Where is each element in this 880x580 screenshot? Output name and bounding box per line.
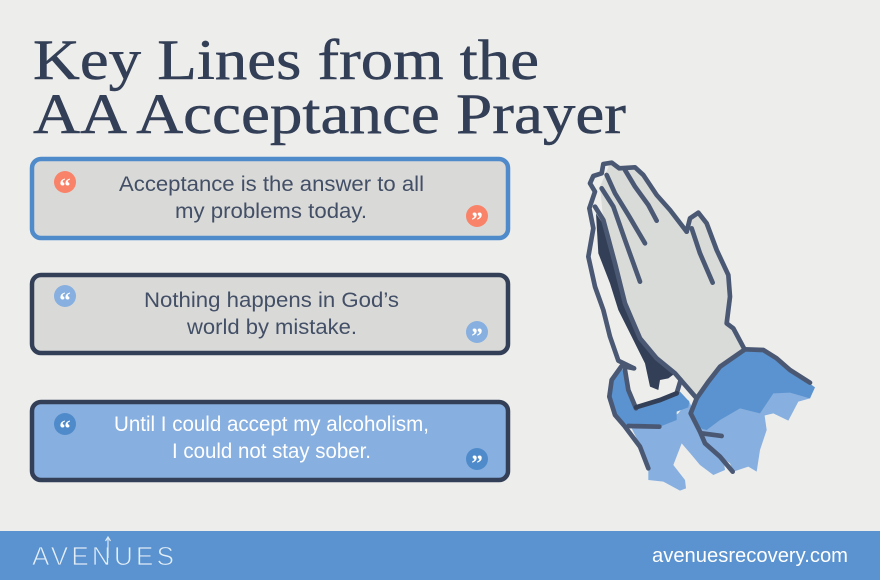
quote 2 text — [144, 289, 399, 339]
icon: opening quote dark blue: “ — [59, 416, 71, 441]
quote 1 text: my problems today. — [175, 200, 367, 223]
light blue sleeve shading — [632, 387, 813, 491]
hand outlines — [588, 163, 810, 472]
icon: opening quote coral: “ — [59, 174, 71, 199]
quote 3 text: I could not stay sober. — [172, 440, 371, 463]
dark shadow between hands — [596, 213, 675, 390]
quote 1 text — [119, 173, 424, 223]
grey hand — [600, 163, 744, 398]
quote 3 text: Until I could accept my alcoholism, — [114, 413, 429, 436]
icon: opening quote blue: “ — [59, 288, 71, 313]
footer bar — [0, 531, 880, 580]
panel: quote 1 — [32, 159, 508, 238]
icon: closing quote blue — [466, 321, 488, 349]
icon: opening quote coral — [54, 171, 76, 199]
quote 3 text — [114, 413, 429, 463]
title: AA Acceptance Prayer — [33, 83, 626, 146]
quote 2 text: world by mistake. — [186, 316, 357, 339]
icon: closing quote coral — [466, 205, 488, 233]
icon: closing quote coral: ” — [471, 208, 483, 233]
icon: opening quote dark blue — [54, 413, 76, 441]
icon: opening quote blue — [54, 285, 76, 313]
icon: praying hands — [588, 163, 815, 491]
icon: closing quote dark blue — [466, 448, 488, 476]
quote 2 text: Nothing happens in God’s — [144, 289, 399, 312]
icon: closing quote dark blue: ” — [471, 451, 483, 476]
title: Key Lines from the — [33, 29, 539, 92]
website url: avenuesrecovery.com — [652, 545, 848, 567]
quote 1 text: Acceptance is the answer to all — [119, 173, 424, 196]
panel: quote 2 — [32, 275, 508, 353]
title — [33, 29, 626, 146]
panel: quote 3 — [32, 402, 508, 480]
icon: closing quote blue: ” — [471, 324, 483, 349]
mid blue cuffs — [610, 349, 815, 430]
logo: Avenues: AVENUES — [32, 541, 174, 571]
